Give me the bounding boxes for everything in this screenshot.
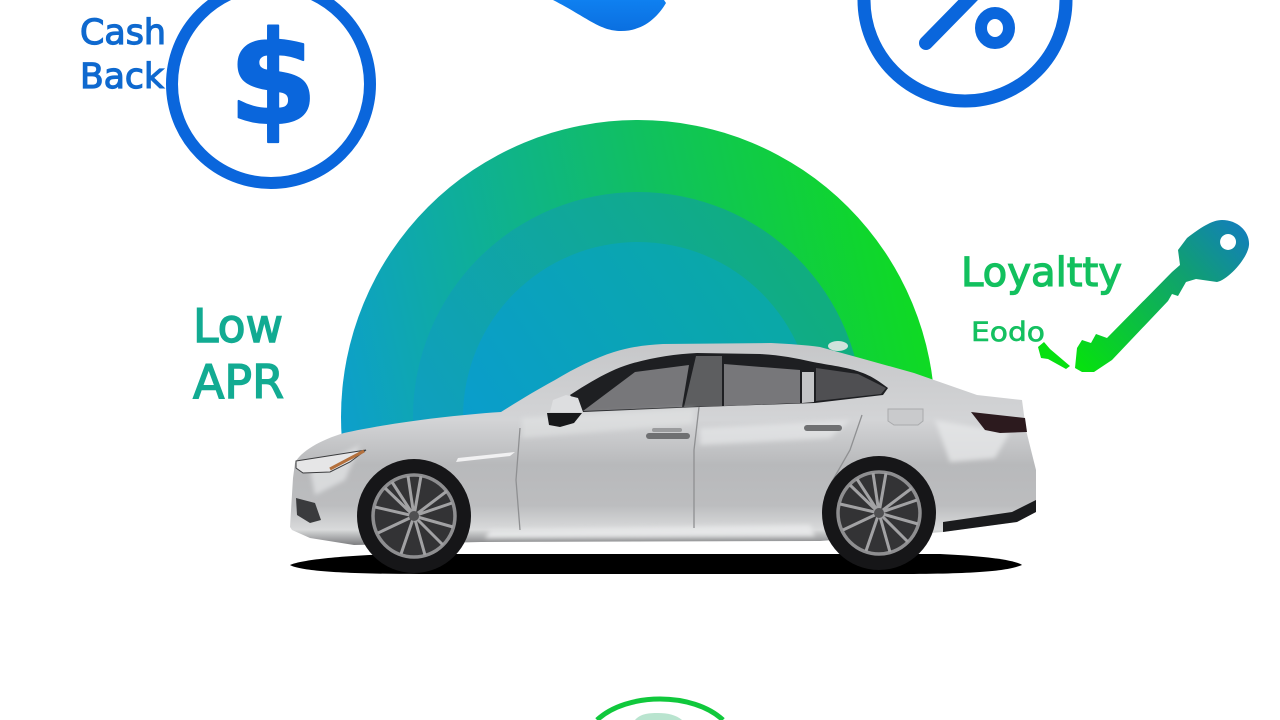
icon: percent badge: [864, 0, 1066, 101]
car shadow: [290, 554, 1022, 574]
door seams and handles: [456, 407, 923, 530]
label: low apr: APR: [193, 355, 284, 409]
car: [290, 341, 1036, 573]
front wheel: [357, 459, 471, 573]
rear bumper strip: [943, 500, 1036, 532]
front grille: [296, 498, 321, 523]
car body: [290, 343, 1036, 545]
car roof tag: [828, 341, 848, 351]
label: cash back: Cash: [80, 13, 166, 53]
mirror: [547, 395, 583, 427]
label: loyalty: Loyaltty: [961, 250, 1122, 296]
label: cash back: Back: [80, 57, 165, 97]
rear wheel: [822, 456, 936, 570]
body highlights: [310, 408, 1010, 538]
icon: loyalty key: [1038, 220, 1249, 372]
window frame and glass: [570, 353, 888, 412]
icon: green badge cropped at bottom: [597, 699, 723, 720]
label: low apr: Low: [193, 299, 283, 353]
headlight: [296, 450, 366, 473]
label: small code: Eodo: [971, 317, 1045, 348]
taillight: [971, 412, 1027, 433]
label: cash back: [80, 13, 166, 97]
icon: dollar coin: [172, 0, 370, 183]
label: low apr: [193, 299, 284, 409]
gauge arch: [341, 120, 933, 434]
icon: dollar coin: $: [228, 5, 318, 154]
icon: blue shape cropped at top: [553, 0, 666, 31]
